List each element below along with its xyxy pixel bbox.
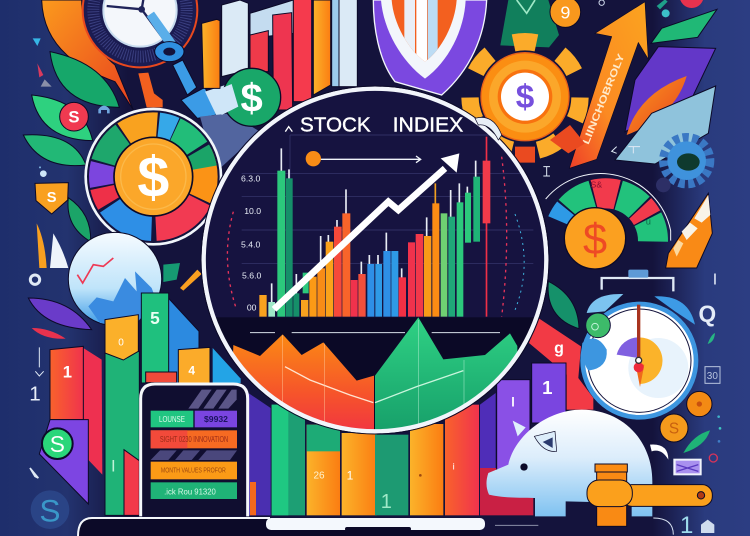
green dollar coin	[223, 68, 281, 126]
purple right leaf	[625, 47, 716, 132]
piggy bank	[486, 410, 668, 516]
green leaf middle	[32, 95, 93, 141]
orange up arrow: LIINCHOBROLY	[581, 52, 627, 146]
orange red area chart	[233, 334, 374, 430]
purple bar 2	[532, 363, 566, 423]
coins and small icons: S	[669, 420, 679, 437]
candlestick wicks	[272, 148, 476, 303]
green orange bar under lens	[307, 425, 340, 515]
small margin leaf	[30, 468, 38, 478]
phone divider stripes	[151, 450, 237, 460]
left margin arrow and number	[29, 347, 44, 406]
orange-red bar: 1	[63, 362, 72, 381]
dotted side arcs	[227, 157, 507, 317]
phone button: lounge: LOUNSE	[159, 414, 185, 424]
phone header stripes	[188, 390, 237, 409]
green bar under lens: 1	[381, 491, 392, 513]
chart title: INDIEX	[393, 114, 464, 137]
coins and small icons	[660, 333, 721, 462]
top-right cluster: shield, gear, arrow, gauge	[373, 0, 717, 308]
laptop base bar	[78, 518, 485, 536]
candlestick bars	[259, 137, 490, 317]
orange bar under lens: 1	[347, 468, 354, 482]
small red S coin: S	[68, 108, 80, 127]
blue triangle panel	[213, 348, 241, 383]
donut chart coin: $	[137, 146, 169, 210]
red ribbon	[529, 318, 593, 410]
corner curve	[653, 518, 673, 535]
lens ring	[204, 89, 546, 431]
purple panel right of phone	[248, 393, 271, 515]
margin glyphs: Q	[699, 300, 716, 326]
orange bar under lens	[342, 433, 377, 515]
green leaf large	[50, 52, 119, 107]
phone button: value: $9932	[204, 414, 228, 424]
bottom-left cluster: bars and phone	[28, 232, 377, 529]
green orange bar under lens: 26	[313, 471, 325, 482]
margin glyphs	[680, 272, 720, 536]
small red S coin	[60, 102, 88, 131]
thin base line	[495, 524, 538, 527]
lower dark band	[216, 317, 534, 429]
white feather tips	[37, 223, 68, 268]
red bar under lens	[445, 405, 479, 515]
y axis labels: 10.0	[244, 206, 261, 216]
blue S emblem	[31, 490, 69, 529]
y axis labels	[241, 173, 261, 313]
fist cuff over coin	[213, 84, 238, 115]
y axis labels: 6.3.0	[241, 173, 260, 183]
green area chart	[375, 317, 517, 440]
semicircle gauge: S&	[591, 179, 602, 189]
lens inner rim	[201, 86, 549, 434]
phone button: green row: .ick Rou 91320	[164, 487, 216, 497]
top right fragments	[599, 0, 704, 17]
orange gauge coin: $	[583, 216, 607, 264]
chart title	[284, 117, 464, 132]
green bar under lens	[272, 405, 305, 515]
orange white feather	[666, 193, 712, 268]
chart title: STOCK	[300, 114, 371, 137]
phone button: red orange row: SIGHT 0230 INNOVATION	[160, 435, 228, 444]
green top shape	[500, 0, 559, 47]
alarm clock	[582, 270, 696, 417]
baseline dashes	[250, 332, 500, 334]
orange shield badge	[35, 183, 68, 214]
yellow bar 4: 4	[188, 364, 195, 378]
tall green bar 5	[141, 293, 169, 383]
orange up arrow	[569, 2, 648, 168]
blue gear	[656, 138, 709, 192]
purple bar 1: l	[511, 395, 515, 409]
pale blue leaf	[615, 86, 716, 164]
yellow bar 4	[178, 347, 210, 383]
tall green and yellow bar: I	[111, 456, 116, 475]
orange bar under lens	[410, 424, 443, 515]
left margin arrow and number: 1	[29, 383, 41, 406]
margin glyphs: I	[713, 272, 717, 289]
dark red base	[480, 468, 533, 515]
top bar group	[202, 0, 357, 110]
globe	[68, 232, 162, 326]
green right leaf	[651, 9, 717, 43]
y axis labels: 5.4.0	[241, 239, 260, 249]
gray-blue rock	[200, 113, 260, 168]
small red strip	[146, 372, 177, 383]
y axis labels: 00	[247, 303, 257, 313]
purple wedge	[39, 420, 88, 504]
wrench handle	[147, 12, 233, 118]
orange-red bar	[50, 346, 83, 420]
red feather leaf	[32, 328, 66, 339]
tall green and yellow bar	[105, 315, 139, 515]
red side panel	[83, 348, 102, 475]
green bar under lens	[375, 435, 408, 515]
y axis labels: 5.6.0	[242, 270, 261, 280]
purple feather leaf	[28, 298, 92, 330]
ribbon glyph: g	[554, 340, 564, 357]
green leaf lower	[23, 135, 86, 166]
lens clasp	[475, 117, 502, 140]
donut chart coin	[82, 105, 225, 248]
small green stack	[163, 263, 202, 291]
bottom-right cluster: bars, clock, piggy, hammer	[375, 270, 721, 536]
small icons	[543, 147, 640, 176]
blue side panel	[168, 298, 199, 383]
phone button: orange row: MONTH VALUES PROFOR	[161, 466, 226, 475]
top-left cluster: clock, leaves, bars, donut	[23, 0, 357, 268]
hammer	[587, 464, 712, 526]
orange coin 9: 9	[560, 2, 570, 22]
orange shield badge: S	[47, 190, 57, 206]
tall green bar 5: 5	[150, 308, 160, 328]
tall green and yellow bar: 0	[118, 338, 124, 349]
margin glyphs: 30	[707, 371, 718, 382]
green S coin	[42, 428, 73, 459]
green leaf small	[68, 198, 91, 242]
semicircle gauge	[539, 173, 673, 308]
purple bar 2: 1	[542, 377, 553, 398]
orange gauge coin	[564, 208, 626, 269]
red bar under lens: i	[453, 462, 455, 472]
red bar behind phone	[124, 450, 139, 515]
main lens panel	[200, 86, 550, 440]
dark purple bar	[480, 393, 496, 468]
green leaf	[548, 281, 579, 329]
grid lines	[242, 134, 534, 264]
semicircle gauge: u	[646, 217, 651, 227]
orange coin 9	[550, 0, 581, 27]
purple bar 1	[497, 380, 530, 470]
small purple card	[673, 459, 702, 475]
shield	[373, 0, 487, 95]
orange right leaf	[627, 76, 687, 135]
orange accent shard	[138, 73, 163, 107]
blue S emblem: S	[39, 492, 61, 528]
green S coin: S	[50, 431, 65, 457]
gear: $	[516, 79, 535, 116]
dotted blue arc	[515, 214, 524, 310]
orange sliver beside phone	[250, 482, 256, 515]
orange feather leaf	[42, 0, 133, 110]
rising white trend arrow	[274, 153, 459, 309]
phone	[141, 384, 248, 516]
feather stripes	[673, 195, 710, 257]
green dollar coin: $	[241, 77, 263, 121]
slider with orange dot	[306, 151, 421, 166]
gear icon	[30, 275, 40, 284]
gear	[460, 31, 590, 163]
small decorations	[33, 38, 110, 177]
top clock	[83, 0, 197, 67]
